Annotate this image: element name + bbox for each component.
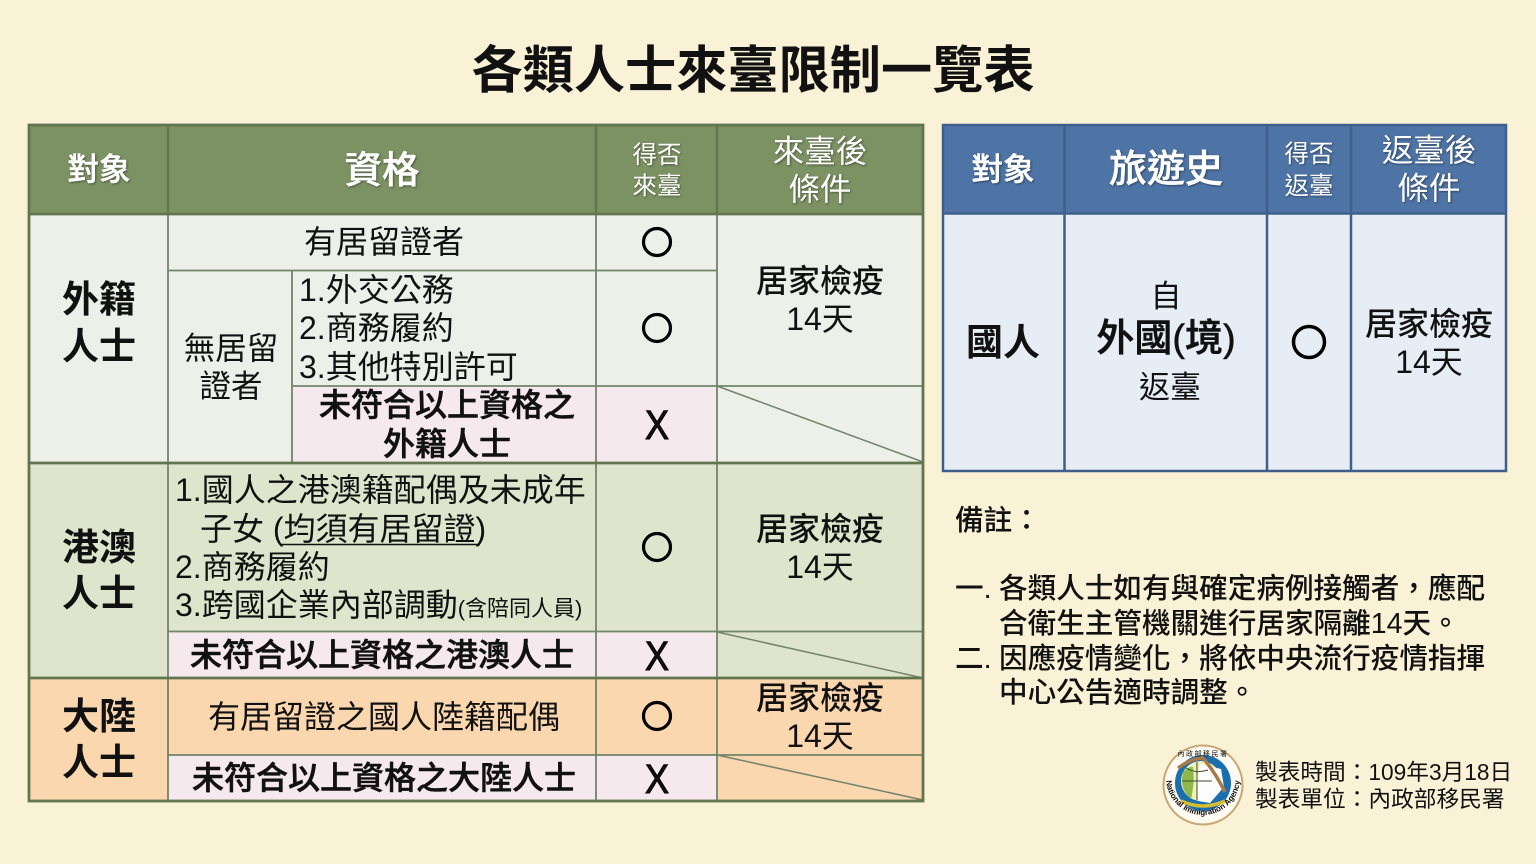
row group: mainland China: X bbox=[645, 756, 669, 802]
row group: Hong Kong and Macao: 1.國人之港澳籍配偶及未成年 bbox=[175, 472, 586, 508]
notes text block: 備註： bbox=[955, 505, 1041, 537]
footer credits: 製表單位：內政部移民署 bbox=[1255, 786, 1505, 812]
citizens row: 返臺 bbox=[1139, 370, 1201, 405]
table header: blue bbox=[943, 125, 1506, 213]
footer credits: 製表時間：109年3月18日 bbox=[1255, 759, 1512, 785]
table header: blue: 條件 bbox=[1397, 170, 1461, 206]
panel: citizens table bbox=[943, 125, 1506, 471]
notes text block: 中心公告適時調整。 bbox=[999, 677, 1256, 709]
row group: Hong Kong and Macao: 未符合以上資格之港澳人士 bbox=[190, 637, 574, 673]
row group: Hong Kong and Macao: 子女 (均須有居留證) bbox=[200, 511, 486, 547]
row group: foreign nationals: 居家檢疫 bbox=[756, 263, 884, 299]
notes text block: 一. bbox=[955, 573, 992, 605]
row group: mainland China bbox=[29, 678, 923, 802]
table header: green: 來臺 bbox=[632, 172, 682, 200]
panel: foreign arrivals table bbox=[29, 125, 923, 802]
row group: foreign nationals: 證者 bbox=[199, 368, 263, 404]
row group: Hong Kong and Macao: 14天 bbox=[786, 549, 854, 585]
notes text block: 二. bbox=[955, 643, 992, 675]
citizens row: 居家檢疫 bbox=[1365, 306, 1493, 342]
icon: National Immigration Agency logo: National Immigration Agency bbox=[1166, 780, 1242, 817]
row group: Hong Kong and Macao bbox=[29, 463, 923, 679]
row group: foreign nationals bbox=[29, 214, 923, 463]
row group: foreign nationals: 3.其他特別許可 bbox=[299, 349, 518, 385]
row group: foreign nationals: 1.外交公務 bbox=[299, 272, 454, 308]
row group: foreign nationals: 外籍 bbox=[62, 279, 136, 320]
row group: foreign nationals: 14天 bbox=[786, 301, 854, 337]
row group: mainland China: 未符合以上資格之大陸人士 bbox=[192, 760, 576, 796]
table header: blue: 對象 bbox=[971, 151, 1035, 187]
row group: mainland China: 居家檢疫 bbox=[756, 680, 884, 716]
table header: blue: 返臺後 bbox=[1382, 132, 1476, 168]
row group: mainland China: 14天 bbox=[786, 718, 854, 754]
table header: green: 資格 bbox=[344, 149, 420, 191]
notes text block: 各類人士如有與確定病例接觸者，應配 bbox=[999, 573, 1485, 605]
table header: blue: 得否 bbox=[1284, 140, 1334, 168]
table header: green: 來臺後 bbox=[773, 133, 867, 169]
notes text block: 合衛生主管機關進行居家隔離14天。 bbox=[999, 608, 1460, 640]
row group: foreign nationals: 未符合以上資格之 bbox=[319, 387, 575, 423]
row group: foreign nationals: 2.商務履約 bbox=[299, 310, 454, 346]
row group: Hong Kong and Macao: 2.商務履約 bbox=[175, 549, 330, 585]
row group: foreign nationals: X bbox=[645, 402, 669, 448]
footer credits bbox=[1255, 759, 1512, 812]
row group: foreign nationals: 有居留證者 bbox=[304, 224, 464, 260]
table header: green bbox=[29, 125, 923, 214]
icon: National Immigration Agency logo: 內政部移民署 bbox=[1178, 749, 1228, 758]
table header: green: 條件 bbox=[788, 171, 852, 207]
table header: green: 對象 bbox=[67, 151, 131, 187]
notes text block: 因應疫情變化，將依中央流行疫情指揮 bbox=[999, 643, 1485, 675]
table header: blue: 返臺 bbox=[1284, 172, 1334, 200]
citizens row bbox=[943, 213, 1506, 471]
citizens row: 14天 bbox=[1395, 344, 1463, 380]
row group: Hong Kong and Macao: 居家檢疫 bbox=[756, 511, 884, 547]
row group: Hong Kong and Macao: X bbox=[645, 633, 669, 679]
row group: mainland China: 人士 bbox=[62, 742, 136, 783]
row group: mainland China: 大陸 bbox=[62, 696, 136, 737]
row group: foreign nationals: 外籍人士 bbox=[383, 426, 511, 462]
row group: foreign nationals: 人士 bbox=[62, 326, 136, 367]
title: 各類人士來臺限制一覽表 bbox=[471, 42, 1035, 99]
table header: blue: 旅遊史 bbox=[1109, 149, 1223, 191]
citizens row: 外國(境) bbox=[1096, 318, 1236, 360]
row group: Hong Kong and Macao: 人士 bbox=[62, 573, 136, 614]
citizens row: 國人 bbox=[966, 322, 1040, 363]
notes text block bbox=[955, 505, 1485, 709]
table header: green: 得否 bbox=[632, 141, 682, 169]
row group: foreign nationals: 無居留 bbox=[184, 330, 278, 366]
row group: mainland China: 有居留證之國人陸籍配偶 bbox=[208, 699, 560, 735]
row group: Hong Kong and Macao: 港澳 bbox=[62, 527, 136, 568]
icon: National Immigration Agency logo bbox=[1162, 744, 1244, 826]
row group: Hong Kong and Macao: 3.跨國企業內部調動(含陪同人員) bbox=[175, 587, 582, 623]
citizens row: 自 bbox=[1150, 279, 1182, 314]
